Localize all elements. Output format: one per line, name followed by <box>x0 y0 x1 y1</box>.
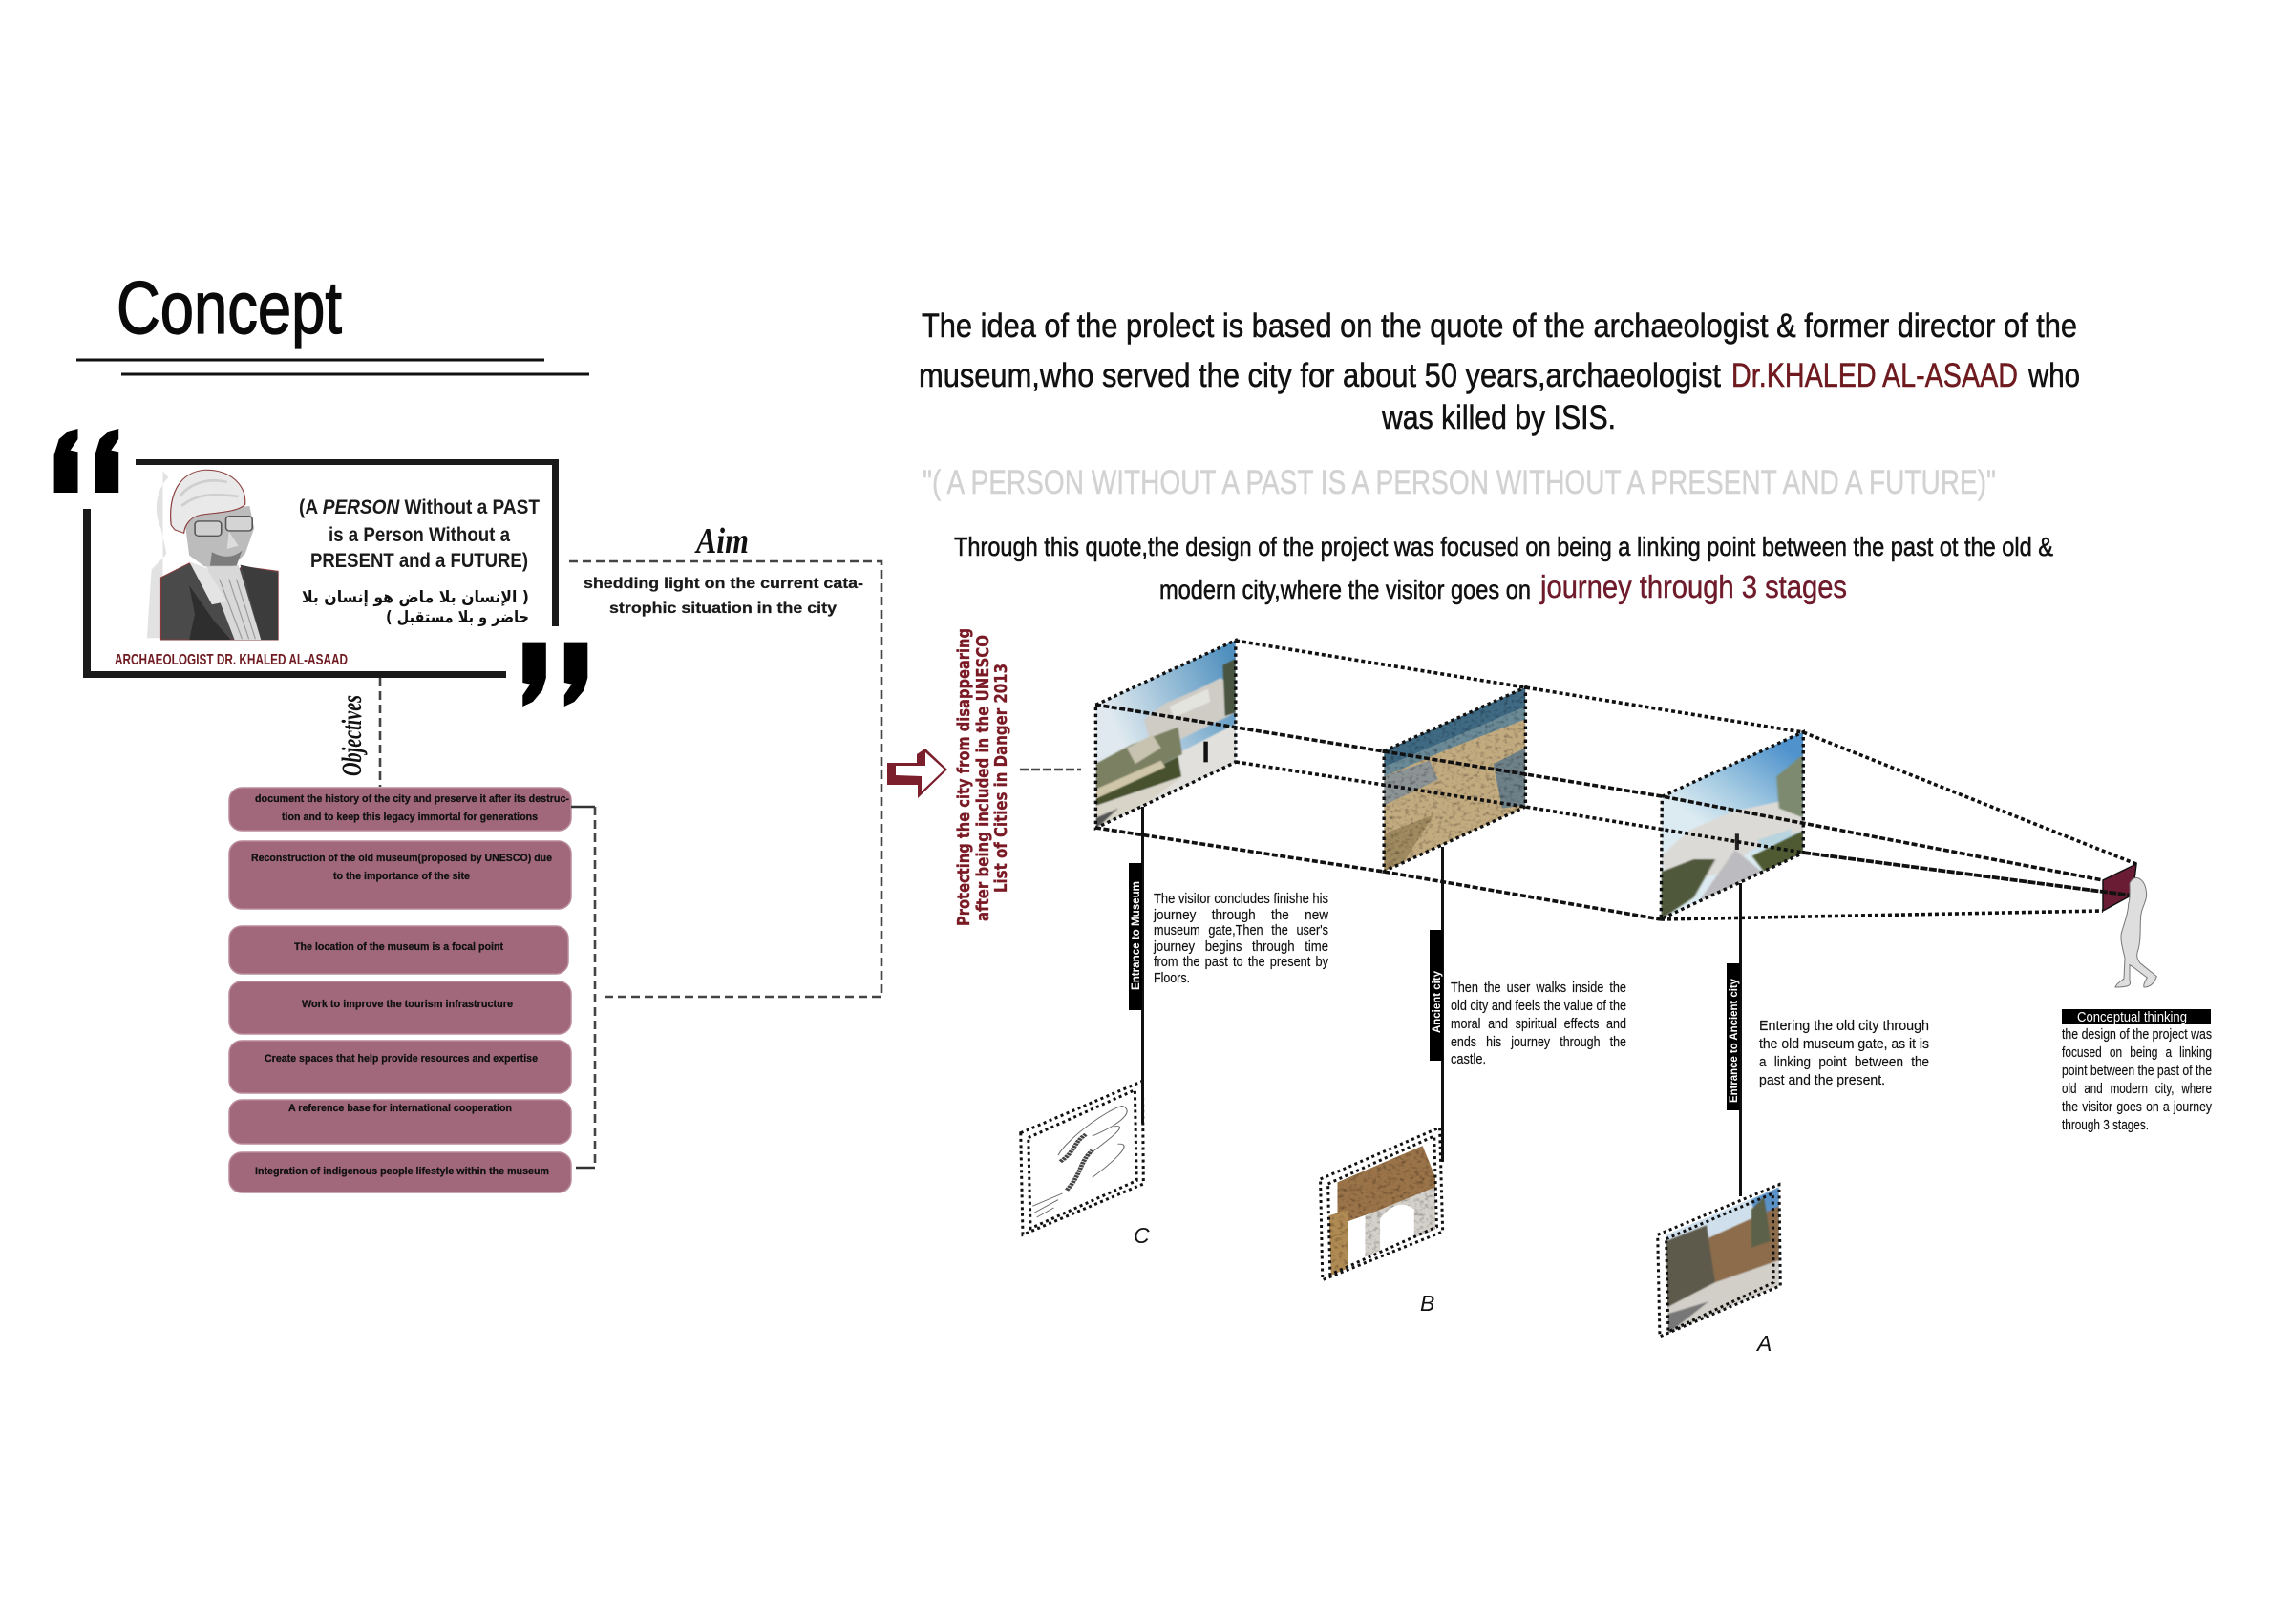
stage C description: journey through the new <box>1153 907 1328 923</box>
stage C stem and label <box>1129 807 1144 1124</box>
panel: conceptual thinking: focused on being a linking <box>2062 1044 2212 1061</box>
stage C description: from the past to the present by <box>1154 954 1328 970</box>
stage C description: The visitor concludes finishe his <box>1154 891 1328 907</box>
rotated UNESCO note: List of Cities in Danger 2013 <box>991 664 1011 893</box>
stage A description <box>1759 1018 1929 1088</box>
quote text: (A PERSON Without a PAST <box>299 496 540 518</box>
aim text: shedding light on the current cata- <box>584 576 863 592</box>
image: A old museum <box>1658 1185 1781 1337</box>
objective 2: Reconstruction of the old museum(proposed by UNESCO) due <box>251 853 552 864</box>
stage B description: old city and feels the value of the <box>1451 998 1626 1014</box>
stage A description: past and the present. <box>1759 1072 1885 1088</box>
quote text: is a Person Without a <box>329 524 510 546</box>
image: C sketch plan <box>1021 1081 1143 1234</box>
portrait caption: ARCHAEOLOGIST DR. KHALED AL-ASAAD <box>115 652 348 668</box>
stage A description: Entering the old city through <box>1759 1018 1929 1034</box>
intro paragraph: museum,who served the city for about 50 years,archaeologist <box>919 357 1721 394</box>
design statement: Through this quote,the design of the project was focused on being a linking point between the past ot the old & <box>954 532 2053 561</box>
stage B stem and label <box>1430 847 1444 1162</box>
stage B description: castle. <box>1451 1051 1486 1067</box>
aim connector <box>569 561 881 997</box>
stage A description: the old museum gate, as it is <box>1759 1036 1929 1052</box>
icon: visitor silhouette <box>2115 877 2156 987</box>
quote text: PRESENT and a FUTURE) <box>310 550 528 572</box>
image: stage C render <box>1093 638 1238 829</box>
intro paragraph: The idea of the prolect is based on the quote of the archaeologist & former director of the <box>922 307 2077 345</box>
panel: conceptual thinking: Conceptual thinking <box>2077 1009 2187 1025</box>
quote text <box>299 496 540 572</box>
stage C stem and label: Entrance to Museum <box>1131 881 1142 990</box>
panel: conceptual thinking: through 3 stages. <box>2062 1117 2149 1133</box>
stage A description: a linking point between the <box>1759 1054 1929 1070</box>
objective 4: Work to improve the tourism infrastructure <box>302 999 513 1010</box>
visitor viewing plane <box>2103 864 2136 911</box>
objective 6: A reference base for international cooperation <box>288 1103 512 1114</box>
stage C description <box>1153 891 1328 986</box>
design statement: modern city,where the visitor goes on <box>1159 575 1531 604</box>
objectives bracket <box>571 807 595 1168</box>
objective 2: to the importance of the site <box>333 871 470 882</box>
icon: closing quotation marks <box>522 643 587 707</box>
objective 7 <box>229 1152 571 1192</box>
image: stage B aerial <box>1383 685 1528 874</box>
connector to diagram <box>1020 769 1081 770</box>
panel: conceptual thinking: the design of the project was <box>2062 1026 2212 1043</box>
label B: B <box>1420 1291 1434 1316</box>
design statement: journey through 3 stages <box>1539 569 1847 604</box>
stage A stem and label: Entrance to Ancient city <box>1729 978 1740 1103</box>
stage B description <box>1451 980 1626 1067</box>
stage B description: Then the user walks inside the <box>1451 980 1626 996</box>
objective 3 <box>229 926 568 974</box>
arrow <box>887 749 947 798</box>
intro paragraph: who <box>2027 357 2080 394</box>
heading: objectives: Objectives <box>336 695 368 776</box>
label C: C <box>1134 1223 1150 1248</box>
heading: aim: Aim <box>694 521 749 561</box>
objective 1: tion and to keep this legacy immortal for generations <box>282 812 538 823</box>
objective 1 <box>229 788 571 831</box>
title: Concept <box>117 265 342 349</box>
icon: opening quotation marks <box>54 429 118 493</box>
stage C description: museum gate,Then the user's <box>1154 922 1328 939</box>
objective 5 <box>229 1041 571 1093</box>
quote highlight: "( A PERSON WITHOUT A PAST IS A PERSON WITHOUT A PRESENT AND A FUTURE)" <box>923 464 1996 501</box>
stage C description: journey begins through time <box>1153 939 1328 955</box>
intro paragraph: was killed by ISIS. <box>1381 399 1616 436</box>
stage A stem and label <box>1727 883 1742 1196</box>
panel: objectives list <box>229 788 571 1192</box>
rotated UNESCO note <box>954 628 1011 926</box>
sight line to eye <box>1803 853 2133 896</box>
arabic quote: ( الإنسان بلا ماض هو إنسان بلا <box>302 588 529 607</box>
aim text <box>584 576 863 617</box>
panel: quote frame <box>54 429 587 707</box>
objective 7: Integration of indigenous people lifestyle within the museum <box>255 1166 549 1177</box>
objective 6 <box>229 1100 571 1144</box>
image: B arch ruin <box>1321 1128 1443 1280</box>
aim text: strophic situation in the city <box>609 601 837 617</box>
rotated UNESCO note: Protecting the city from disappearing <box>954 628 974 926</box>
panel: conceptual thinking: the visitor goes on a journey <box>2062 1099 2212 1115</box>
intro paragraph <box>919 307 2080 436</box>
objective 1: document the history of the city and preserve it after its destruc- <box>255 793 569 805</box>
title <box>76 265 589 376</box>
objective 5: Create spaces that help provide resources and expertise <box>265 1053 538 1065</box>
objective 3: The location of the museum is a focal point <box>294 941 503 953</box>
panel: conceptual thinking <box>2062 1009 2212 1133</box>
panel: conceptual thinking: point between the past of the <box>2062 1063 2212 1079</box>
arabic quote <box>302 588 529 627</box>
objectives connector <box>379 678 381 787</box>
label A: A <box>1755 1331 1772 1356</box>
arabic quote: حاضر و بلا مستقبل ) <box>386 608 529 627</box>
objective 4 <box>229 981 571 1034</box>
stage B stem and label: Ancient city <box>1432 970 1443 1033</box>
intro paragraph: Dr.KHALED AL-ASAAD <box>1731 357 2018 394</box>
objective 2 <box>229 841 571 909</box>
stage C description: Floors. <box>1154 970 1190 986</box>
stage B description: moral and spiritual effects and <box>1451 1016 1626 1032</box>
rotated UNESCO note: after being included in the UNESCO <box>973 635 993 921</box>
perspective sight lines <box>1095 641 2136 919</box>
portrait of Dr. Khaled Al-Asaad <box>147 470 278 640</box>
image: stage A render <box>1660 730 1806 921</box>
stage B description: ends his journey through the <box>1451 1034 1626 1050</box>
panel: conceptual thinking: old and modern city, where <box>2062 1081 2212 1097</box>
design statement <box>954 532 2053 604</box>
